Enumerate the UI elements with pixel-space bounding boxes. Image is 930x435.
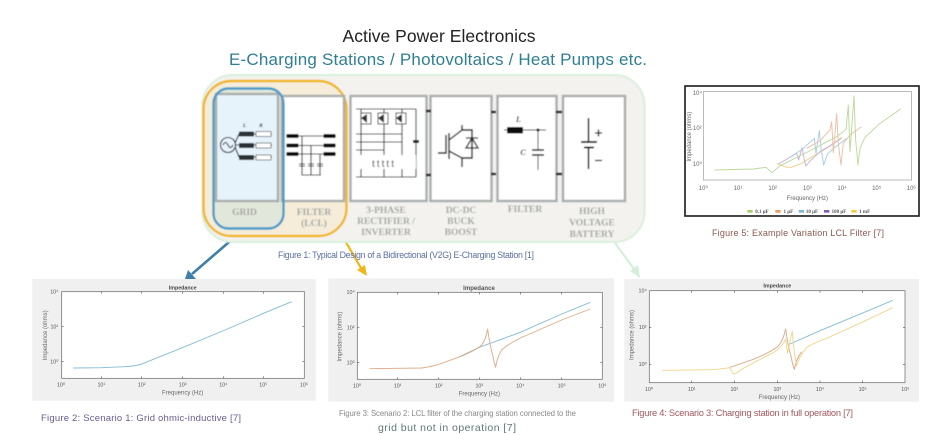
chart: figure 3: 10² bbox=[435, 383, 443, 389]
arrow: system to scenario 3 bbox=[615, 243, 640, 278]
block: LCL filter: FILTER bbox=[297, 208, 331, 218]
block: grid: L bbox=[242, 123, 247, 129]
block: high voltage battery: VOLTAGE bbox=[569, 218, 615, 228]
caption: figure 5: Figure 5: Example Variation LCL Filter [7] bbox=[712, 228, 884, 238]
chart: figure 5: 1 µF bbox=[784, 210, 793, 215]
block: DC-DC buck boost: DC-DC bbox=[446, 206, 476, 216]
chart: figure 3: 10⁰ bbox=[353, 383, 361, 389]
chart: figure 4: Frequency (Hz) bbox=[759, 395, 800, 401]
chart: figure 3: 10⁶ bbox=[598, 383, 606, 389]
chart: figure 5: 0.1 µF bbox=[755, 210, 769, 215]
chart: figure 5: 10⁵ bbox=[872, 185, 882, 192]
arrow: grid to scenario 1 bbox=[184, 230, 243, 282]
chart: figure 4: 10¹ bbox=[688, 387, 696, 393]
caption: figure 1: Figure 1: Typical Design of a Bidirectional (V2G) E-Charging Station [1] bbox=[278, 250, 534, 260]
chart: figure 5: 10⁶ bbox=[907, 185, 916, 192]
chart: figure 3: 10² bbox=[347, 325, 355, 331]
chart: figure 5: Frequency (Hz) bbox=[787, 196, 828, 202]
chart: figure 3: Frequency (Hz) bbox=[459, 392, 500, 398]
chart: figure 2: 10⁰ bbox=[57, 383, 65, 389]
block: DC filter: L bbox=[515, 115, 521, 124]
block: grid: GRID bbox=[232, 208, 257, 218]
chart: figure 2: 10⁵ bbox=[259, 383, 267, 389]
chart: figure 2: 10⁴ bbox=[50, 289, 59, 295]
block: LCL filter: (LCL) bbox=[301, 218, 327, 229]
block: high voltage battery bbox=[563, 96, 625, 240]
chart: figure 5: 10² bbox=[693, 126, 702, 132]
chart: figure 5: 10⁰ bbox=[699, 185, 708, 192]
block: high voltage battery: HIGH bbox=[579, 207, 606, 217]
caption: figure 3: grid but not in operation [7] bbox=[378, 422, 516, 434]
caption: figure 4: Figure 4: Scenario 3: Charging station in full operation [7] bbox=[632, 408, 853, 418]
block: DC filter bbox=[498, 96, 556, 215]
chart: figure 3: 10³ bbox=[475, 383, 483, 389]
block: grid bbox=[216, 94, 278, 218]
block: LCL filter bbox=[282, 96, 344, 229]
chart: figure 5: 100 µF bbox=[832, 210, 846, 215]
chart: figure 3: 10⁴ bbox=[347, 290, 355, 296]
chart: figure 4: Impedance bbox=[763, 283, 791, 289]
chart: figure 4: 10⁰ bbox=[645, 387, 653, 393]
block: DC-DC buck boost: BUCK bbox=[447, 217, 475, 227]
chart: figure 2: 10¹ bbox=[97, 383, 105, 389]
caption: figure 3: Figure 3: Scenario 2: LCL filter of the charging station connected to the bbox=[339, 409, 576, 418]
block: 3-phase rectifier: 3-PHASE bbox=[366, 206, 406, 216]
chart: figure 2: 10⁴ bbox=[219, 383, 228, 389]
chart: figure 4: 10⁴ bbox=[639, 288, 647, 294]
block: high voltage battery: BATTERY bbox=[570, 230, 615, 240]
chart: figure 3: 10¹ bbox=[394, 383, 402, 389]
chart: figure 3: Impedance (ohms) bbox=[338, 312, 344, 362]
chart: figure 3: Impedance bbox=[463, 285, 495, 292]
chart: figure 2: 10² bbox=[50, 324, 58, 330]
chart: figure 2: 10⁶ bbox=[300, 383, 308, 389]
block: DC-DC buck boost bbox=[430, 96, 492, 238]
chart: figure 2: 10³ bbox=[179, 383, 187, 389]
highlight: grid background bbox=[214, 88, 284, 228]
title: Active Power Electronics bbox=[342, 26, 536, 46]
chart: figure 2: Impedance bbox=[169, 285, 197, 291]
caption: figure 2: Figure 2: Scenario 1: Grid ohmic-inductive [7] bbox=[41, 413, 241, 424]
arrow: filter to scenario 2 bbox=[340, 232, 367, 276]
block: DC filter: C bbox=[520, 148, 526, 157]
connectors bbox=[426, 111, 562, 175]
chart: figure 5: 1 mF bbox=[859, 210, 870, 215]
subtitle: E-Charging Stations / Photovoltaics / Heat Pumps etc. bbox=[229, 50, 647, 69]
chart: figure 5: 10⁴ bbox=[693, 90, 702, 97]
chart: figure 4: 10² bbox=[639, 325, 647, 331]
chart: figure 4: 10⁵ bbox=[859, 387, 867, 393]
chart: figure 4: 10⁴ bbox=[816, 387, 825, 393]
chart: figure 2 bbox=[32, 279, 316, 401]
chart: figure 4: 10⁶ bbox=[901, 387, 909, 393]
chart: figure 5: 10³ bbox=[803, 186, 812, 192]
panel: charging station diagram bbox=[202, 75, 644, 242]
block: 3-phase rectifier: INVERTER bbox=[361, 228, 411, 238]
chart: figure 2: Impedance (ohms) bbox=[43, 310, 49, 360]
chart: figure 4: 10⁰ bbox=[639, 362, 647, 368]
chart: figure 3 bbox=[328, 278, 614, 402]
chart: figure 5: 10⁰ bbox=[693, 161, 702, 168]
chart: figure 5: 10⁴ bbox=[837, 185, 847, 192]
chart: figure 5: 10 µF bbox=[806, 210, 818, 215]
chart: figure 2: 10² bbox=[138, 383, 146, 389]
chart: figure 5: Impedance (ohms) bbox=[687, 112, 693, 162]
chart: figure 3: 10⁴ bbox=[516, 383, 525, 389]
chart: figure 4: 10² bbox=[730, 387, 738, 393]
chart: figure 5: 10² bbox=[768, 186, 777, 192]
caption: figure 3 bbox=[339, 409, 576, 434]
block: DC-DC buck boost: BOOST bbox=[445, 228, 478, 238]
chart: figure 3: 10⁵ bbox=[558, 383, 566, 389]
chart: figure 4: 10³ bbox=[773, 387, 781, 393]
block: 3-phase rectifier: RECTIFIER / bbox=[357, 217, 415, 227]
block: 3-phase rectifier: ttttt bbox=[372, 159, 394, 170]
chart: figure 3: 10⁰ bbox=[347, 360, 355, 366]
block: grid: R bbox=[258, 123, 263, 129]
block: 3-phase rectifier bbox=[350, 96, 426, 238]
chart: figure 5 bbox=[685, 86, 919, 216]
chart: figure 4: Impedance (ohms) bbox=[629, 310, 635, 360]
chart: figure 4 bbox=[624, 279, 919, 402]
chart: figure 5: 10¹ bbox=[734, 186, 742, 192]
highlight: filter section bbox=[204, 81, 346, 236]
panel background bbox=[202, 75, 644, 242]
highlight: grid outline bbox=[214, 88, 284, 228]
chart: figure 2: Frequency (Hz) bbox=[162, 390, 203, 396]
chart: figure 2: 10⁰ bbox=[50, 359, 58, 365]
block: DC filter: FILTER bbox=[508, 205, 542, 215]
